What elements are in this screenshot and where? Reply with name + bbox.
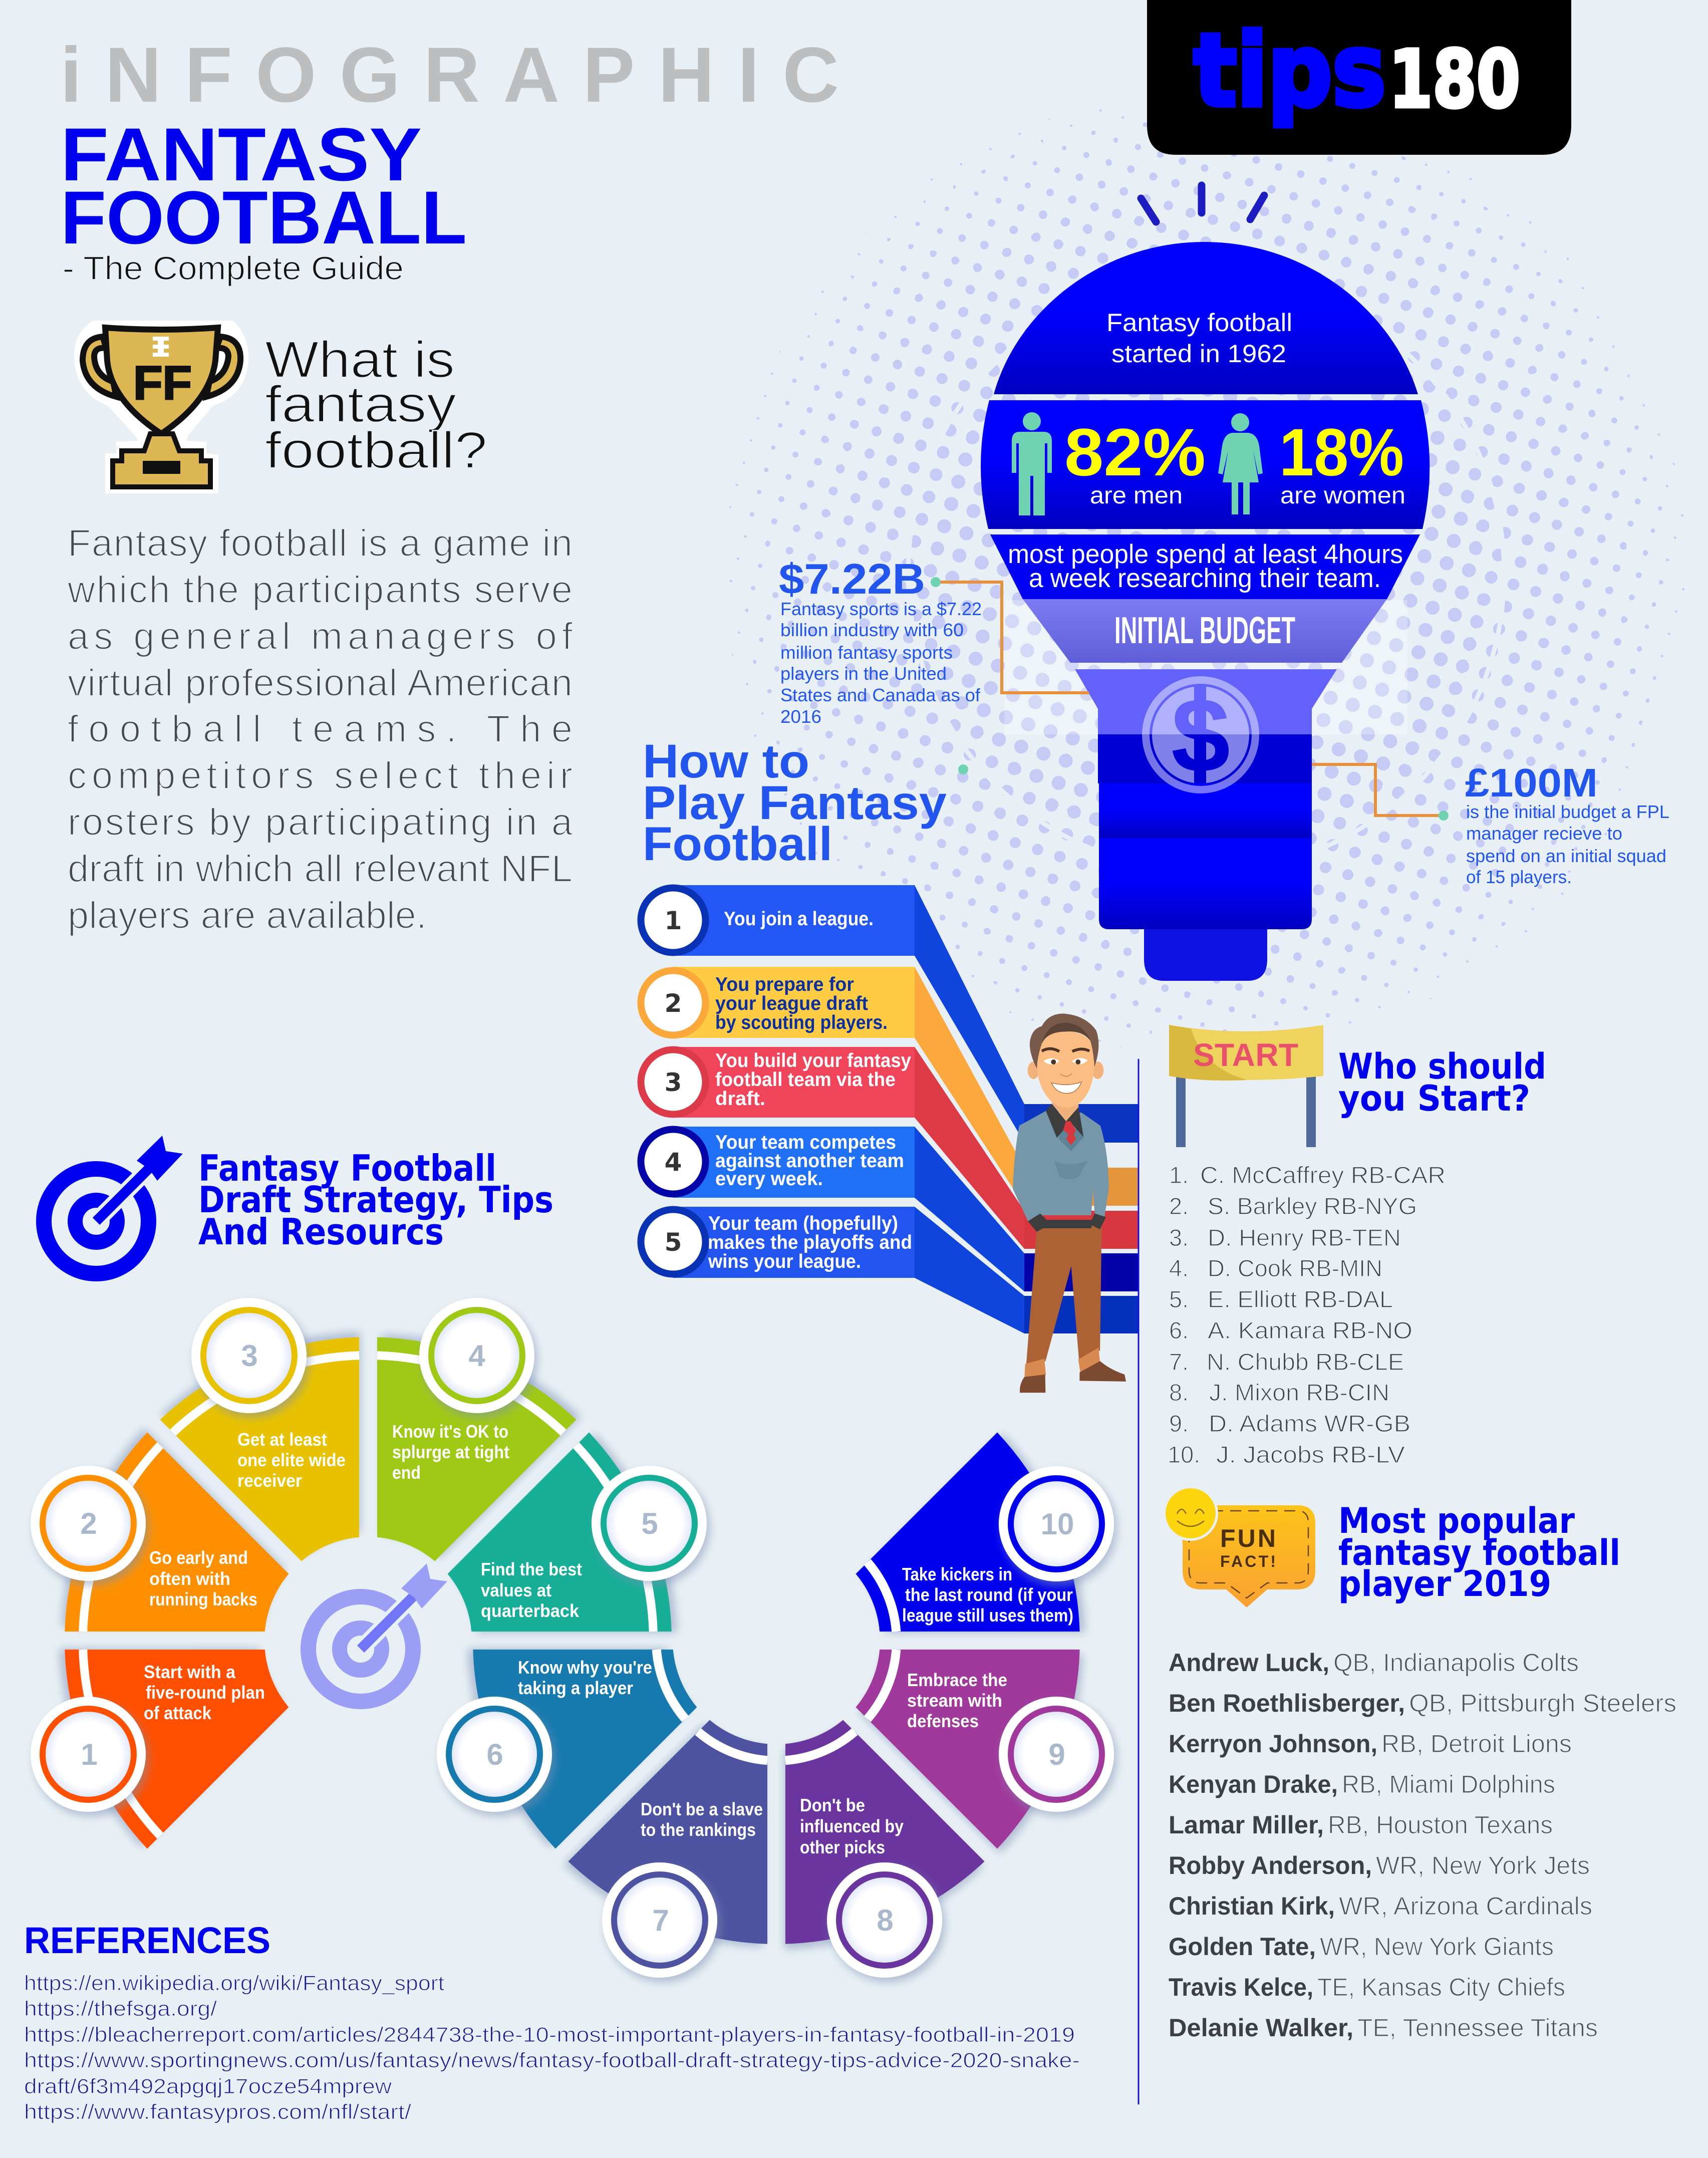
divider line [1138, 1059, 1139, 2104]
list: popular players: Golden Tate, [1169, 1933, 1316, 1961]
list: who to start: 4. [1169, 1255, 1189, 1281]
callout: 7.22B: Fantasy sports is a $7.22 [780, 599, 982, 619]
icon: start banner: START [1193, 1037, 1298, 1073]
list: popular players: Kenyan Drake, [1169, 1770, 1338, 1798]
heading: draft strategy: And Resourcs [198, 1211, 444, 1253]
list: who to start: D. Cook RB-MIN [1208, 1255, 1382, 1281]
text block: what is fantasy football: Fantasy football is a game in [68, 522, 573, 565]
list: who to start: 5. [1169, 1286, 1189, 1312]
icon: FF trophy [74, 321, 248, 493]
icon: fun fact badge: FUN [1220, 1524, 1276, 1552]
list: popular players: RB, Miami Dolphins [1342, 1770, 1555, 1798]
step 1: 1 [665, 906, 682, 935]
heading: references: REFERENCES [24, 1920, 270, 1961]
list: who to start: J. Mixon RB-CIN [1209, 1379, 1389, 1406]
text: started in 1962: started in 1962 [1111, 340, 1286, 368]
tip text 6: Know why you're [518, 1657, 652, 1678]
callout: 7.22B [779, 556, 982, 727]
heading: What is fantasy football [265, 331, 487, 479]
tip text 3 [237, 1429, 346, 1491]
callout: 7.22B: players in the United [780, 663, 947, 684]
petal 4 [377, 1337, 577, 1561]
callout: 100M: is the initial budget a FPL [1466, 801, 1669, 822]
step 3 [637, 1046, 915, 1118]
petal 3 [160, 1279, 459, 1578]
list: popular players: TE, Tennessee Titans [1357, 2014, 1598, 2042]
icon: man [1012, 412, 1052, 515]
tip text 1: Start with a [144, 1662, 236, 1682]
badge 5: 5 [641, 1507, 658, 1540]
tip text 7: to the rankings [641, 1819, 756, 1840]
title: INFOGRAPHIC: iNFOGRAPHIC [60, 32, 839, 119]
list: who to start: D. Henry RB-TEN [1208, 1224, 1401, 1251]
step 5 [637, 1206, 915, 1278]
tip text 6: taking a player [518, 1678, 633, 1698]
text: hours researching [1008, 540, 1403, 593]
badge 10: 10 [1041, 1507, 1074, 1541]
list: popular players [1169, 1649, 1676, 2042]
badge 5 [592, 1466, 707, 1581]
heading: most popular player: Most popular [1338, 1500, 1575, 1541]
ribbon 3 [915, 1047, 1138, 1249]
callout: 100M: £100M [1465, 760, 1598, 805]
heading: most popular player: fantasy football [1338, 1532, 1620, 1573]
light bulb infographic [981, 242, 1430, 981]
badge 8: 8 [877, 1904, 894, 1937]
bulb segment: hours researching [990, 534, 1420, 599]
list: popular players: Andrew Luck, [1169, 1649, 1329, 1677]
reference links: draft/6f3m492apgqj17ocze54mprew [24, 2074, 392, 2098]
text: are men: are men [1090, 482, 1183, 509]
list: who to start: 2. [1169, 1193, 1189, 1219]
text: 18%: 18% [1279, 415, 1404, 490]
tip text 8: Don't be [800, 1795, 865, 1815]
list: who to start: C. McCaffrey RB-CAR [1200, 1162, 1446, 1188]
petal 2 [65, 1432, 289, 1632]
heading: Fantasy Football: FANTASY [61, 112, 422, 196]
tip text 9: defenses [907, 1711, 979, 1731]
reference links: https://www.sportingnews.com/us/fantasy/news/fantasy-football-draft-strategy-tips-advice-2020-snake- [24, 2048, 1080, 2072]
step 4: against another team [715, 1150, 904, 1172]
bulb base sections [1075, 669, 1337, 981]
tip text 7: Don't be a slave [641, 1799, 763, 1819]
logo: tips180 [1147, 0, 1571, 155]
text: hours researching: a week researching their team. [1029, 564, 1381, 593]
text block: what is fantasy football: rosters by participating in a [68, 801, 573, 844]
tip text 8: other picks [800, 1837, 885, 1857]
badge 10 [999, 1466, 1114, 1581]
petal 6 [415, 1549, 714, 1849]
tip text 3: one elite wide [237, 1450, 346, 1470]
text block: what is fantasy football: which the participants serve [67, 569, 573, 611]
list: popular players: Lamar Miller, [1169, 1811, 1324, 1839]
callout: 7.22B: $7.22B [779, 556, 925, 603]
icon: target [44, 1136, 183, 1273]
badge 8 [827, 1862, 942, 1978]
list: who to start: 8. [1169, 1379, 1189, 1406]
icon: FF trophy: FF [133, 357, 192, 410]
badge 1 [31, 1697, 146, 1812]
badge 2: 2 [80, 1507, 97, 1540]
list: popular players: Travis Kelce, [1169, 1973, 1313, 2001]
list: popular players: Delanie Walker, [1169, 2014, 1353, 2042]
tip text 4: end [392, 1462, 421, 1483]
badge 6: 6 [486, 1738, 503, 1771]
icon: fun fact badge [1163, 1486, 1315, 1607]
callout: 100M: manager recieve to [1466, 823, 1622, 844]
tip text 2: Go early and [149, 1547, 248, 1568]
tip text 10 [902, 1564, 1073, 1626]
step 1 [637, 885, 915, 956]
tip text 2: running backs [149, 1589, 257, 1609]
heading: draft strategy: Draft Strategy, Tips [198, 1179, 553, 1221]
list: popular players: RB, Houston Texans [1328, 1811, 1553, 1839]
list: popular players: Kerryon Johnson, [1169, 1730, 1377, 1758]
callout: 7.22B: million fantasy sports [780, 642, 953, 663]
halftone dot field [735, 103, 1677, 1044]
list: who to start: 1. [1169, 1162, 1189, 1188]
step 3: 3 [665, 1068, 682, 1097]
heading: how to play fantasy football [643, 735, 947, 871]
icon: woman [1218, 413, 1263, 514]
tip text 4: splurge at tight [392, 1442, 509, 1462]
ribbon 4 [915, 1127, 1138, 1291]
step 1: You join a league. [724, 908, 874, 930]
step 4: every week. [715, 1168, 823, 1190]
icon: dollar coin [1146, 680, 1255, 789]
tip text 10: Take kickers in [902, 1564, 1012, 1584]
icon: start banner [1169, 1025, 1323, 1147]
text block: what is fantasy football: as general managers of [68, 615, 573, 658]
list: who to start: 3. [1169, 1224, 1189, 1251]
bulb segment: started in 1962 [994, 242, 1418, 394]
petal 1 [7, 1549, 306, 1849]
petal 10 [839, 1432, 1138, 1732]
tip text 4: Know it's OK to [392, 1421, 508, 1442]
list: who to start: A. Kamara RB-NO [1208, 1317, 1412, 1343]
list: popular players: Robby Anderson, [1169, 1851, 1372, 1879]
list: popular players: Ben Roethlisberger, [1169, 1689, 1405, 1717]
heading: who should you start: you Start? [1338, 1078, 1530, 1119]
text block: what is fantasy football: competitors select their [68, 754, 573, 797]
text: started in 1962: Fantasy football [1106, 309, 1292, 337]
step 5: makes the playoffs and [708, 1232, 912, 1253]
tip text 4 [392, 1421, 509, 1483]
list: popular players: RB, Detroit Lions [1381, 1730, 1572, 1758]
list: popular players: TE, Kansas City Chiefs [1317, 1973, 1565, 2001]
text block: what is fantasy football: draft in which all relevant NFL [68, 848, 573, 890]
heading: draft strategy [198, 1147, 553, 1253]
tip text 2: often with [149, 1568, 230, 1589]
steps ribbons [915, 885, 1138, 1333]
list: who to start: 9. [1169, 1410, 1189, 1437]
text: initial budget: INITIAL BUDGET [1114, 609, 1295, 651]
badge 4 [419, 1298, 534, 1413]
petal 5 [431, 1432, 730, 1732]
heading: What is fantasy football: fantasy [265, 375, 457, 433]
badge 9 [999, 1697, 1114, 1812]
tip text 2 [149, 1547, 257, 1609]
badge 9: 9 [1048, 1738, 1065, 1771]
subtitle: - The Complete Guide [63, 249, 404, 287]
icon: light rays [1141, 185, 1264, 222]
callout: 100M: spend on an initial squad [1466, 846, 1666, 866]
list: who to start: S. Barkley RB-NYG [1208, 1193, 1417, 1219]
badge 7: 7 [652, 1904, 669, 1937]
text: hours researching: most people spend at least 4hours [1008, 540, 1403, 569]
tip text 1: of attack [144, 1703, 212, 1723]
tip text 1 [144, 1662, 265, 1723]
text: are women: are women [1280, 482, 1405, 509]
step 2: You prepare for [715, 974, 854, 995]
connector: 7.22B [931, 577, 1089, 693]
step 5: Your team (hopefully) [708, 1213, 898, 1234]
ribbon 2 [915, 967, 1138, 1206]
list: who to start: 10. [1168, 1441, 1200, 1468]
bulb segment: initial budget [1023, 599, 1387, 663]
list: popular players: QB, Indianapolis Colts [1333, 1649, 1579, 1677]
reference links: https://en.wikipedia.org/wiki/Fantasy_sport [24, 1971, 444, 1995]
icon: fun fact badge: FACT! [1220, 1552, 1276, 1570]
step 4: 4 [665, 1148, 682, 1177]
tip text 9: stream with [907, 1690, 1002, 1711]
step 5: wins your league. [708, 1251, 861, 1272]
step 2 [637, 967, 915, 1039]
callout: 7.22B: States and Canada as of [780, 685, 981, 705]
badge 2 [31, 1466, 146, 1581]
badge 6 [437, 1697, 552, 1812]
glass reflection [1004, 600, 1407, 734]
heading: most popular player: player 2019 [1338, 1563, 1551, 1604]
heading: who should you start [1338, 1046, 1546, 1119]
step 3: You build your fantasy [715, 1050, 911, 1071]
tip text 10: league still uses them) [902, 1605, 1073, 1626]
heading: What is fantasy football: football? [265, 421, 487, 479]
list: popular players: WR, New York Giants [1320, 1933, 1554, 1961]
step 4: Your team competes [715, 1132, 896, 1153]
tip text 5 [481, 1559, 582, 1621]
heading: most popular player [1338, 1500, 1620, 1604]
list: popular players: QB, Pittsburgh Steelers [1409, 1689, 1676, 1717]
list: who to start: 6. [1169, 1317, 1189, 1343]
step 4 [637, 1126, 915, 1198]
ribbon 5 [915, 1207, 1138, 1333]
tip text 1: five-round plan [146, 1682, 265, 1703]
callout: 7.22B: billion industry with 60 [780, 620, 964, 640]
illustration: man in sweater [1013, 1013, 1126, 1393]
tip text 3: receiver [237, 1470, 302, 1491]
heading: draft strategy: Fantasy Football [198, 1147, 496, 1189]
callout: 100M: of 15 players. [1466, 867, 1572, 887]
list: popular players: WR, Arizona Cardinals [1339, 1892, 1592, 1920]
badge 3: 3 [241, 1339, 258, 1373]
badge 1: 1 [81, 1738, 98, 1771]
step 2: 2 [665, 989, 682, 1018]
step 2: by scouting players. [715, 1012, 888, 1033]
text: 82%: 82% [1064, 415, 1206, 490]
text block: what is fantasy football: players are available. [68, 894, 427, 937]
list: who to start: 7. [1169, 1348, 1189, 1375]
reference links [24, 1971, 1080, 2123]
tip text 8 [800, 1795, 904, 1857]
text block: what is fantasy football [67, 522, 573, 937]
badge 7 [602, 1862, 717, 1978]
logo: tips180: 180 [1389, 34, 1520, 126]
decorative green dot [958, 764, 968, 774]
callout: 7.22B: 2016 [780, 706, 821, 727]
tip text 5: values at [481, 1580, 551, 1600]
ribbon 1 [915, 885, 1138, 1143]
logo: tips180: tips [1194, 13, 1386, 129]
tip text 6 [518, 1657, 652, 1698]
text block: what is fantasy football: football teams. The [68, 708, 573, 750]
step 3: football team via the [715, 1069, 896, 1091]
list: who to start: J. Jacobs RB-LV [1216, 1441, 1405, 1468]
tip text 9 [907, 1670, 1007, 1731]
step 2: your league draft [715, 993, 868, 1014]
petal 9 [856, 1650, 1080, 1849]
list: who to start: E. Elliott RB-DAL [1208, 1286, 1393, 1312]
badge 3 [191, 1298, 307, 1413]
heading: how to play fantasy football: How to [643, 735, 809, 788]
heading: how to play fantasy football: Play Fantasy [643, 776, 947, 830]
tip text 8: influenced by [800, 1816, 904, 1836]
petal 7 [568, 1720, 767, 1944]
reference links: https://www.fantasypros.com/nfl/start/ [24, 2100, 411, 2123]
callout: 100M [1465, 760, 1669, 887]
reference links: https://thefsga.org/ [24, 1997, 217, 2020]
icon: center target [309, 1563, 447, 1701]
heading: Fantasy Football [61, 112, 467, 259]
text block: what is fantasy football: virtual professional American [68, 662, 573, 704]
reference links: https://bleacherreport.com/articles/2844738-the-10-most-important-players-in-fantasy-football-in-2019 [24, 2023, 1075, 2046]
tip text 9: Embrace the [907, 1670, 1007, 1690]
heading: who should you start: Who should [1338, 1046, 1546, 1087]
tip text 5: quarterback [481, 1600, 580, 1621]
petal 8 [685, 1703, 985, 2002]
heading: What is fantasy football: What is [265, 331, 455, 388]
list: popular players: WR, New York Jets [1376, 1851, 1590, 1879]
heading: Fantasy Football: FOOTBALL [61, 175, 467, 259]
text: started in 1962 [1106, 309, 1292, 368]
list: popular players: Christian Kirk, [1169, 1892, 1335, 1920]
tip text 5: Find the best [481, 1559, 582, 1579]
step 3: draft. [715, 1088, 765, 1110]
tip text 3: Get at least [237, 1429, 327, 1450]
list: who to start: D. Adams WR-GB [1209, 1410, 1410, 1437]
step 5: 5 [665, 1228, 682, 1257]
tip text 7 [641, 1799, 763, 1840]
bulb segment: men and women [981, 400, 1430, 529]
list: who to start [1168, 1162, 1446, 1468]
connector: 100M [1312, 764, 1449, 821]
tip text 10: the last round (if your [905, 1584, 1073, 1605]
badge 4: 4 [468, 1339, 485, 1373]
list: who to start: N. Chubb RB-CLE [1207, 1348, 1404, 1375]
heading: how to play fantasy football: Football [643, 818, 832, 871]
